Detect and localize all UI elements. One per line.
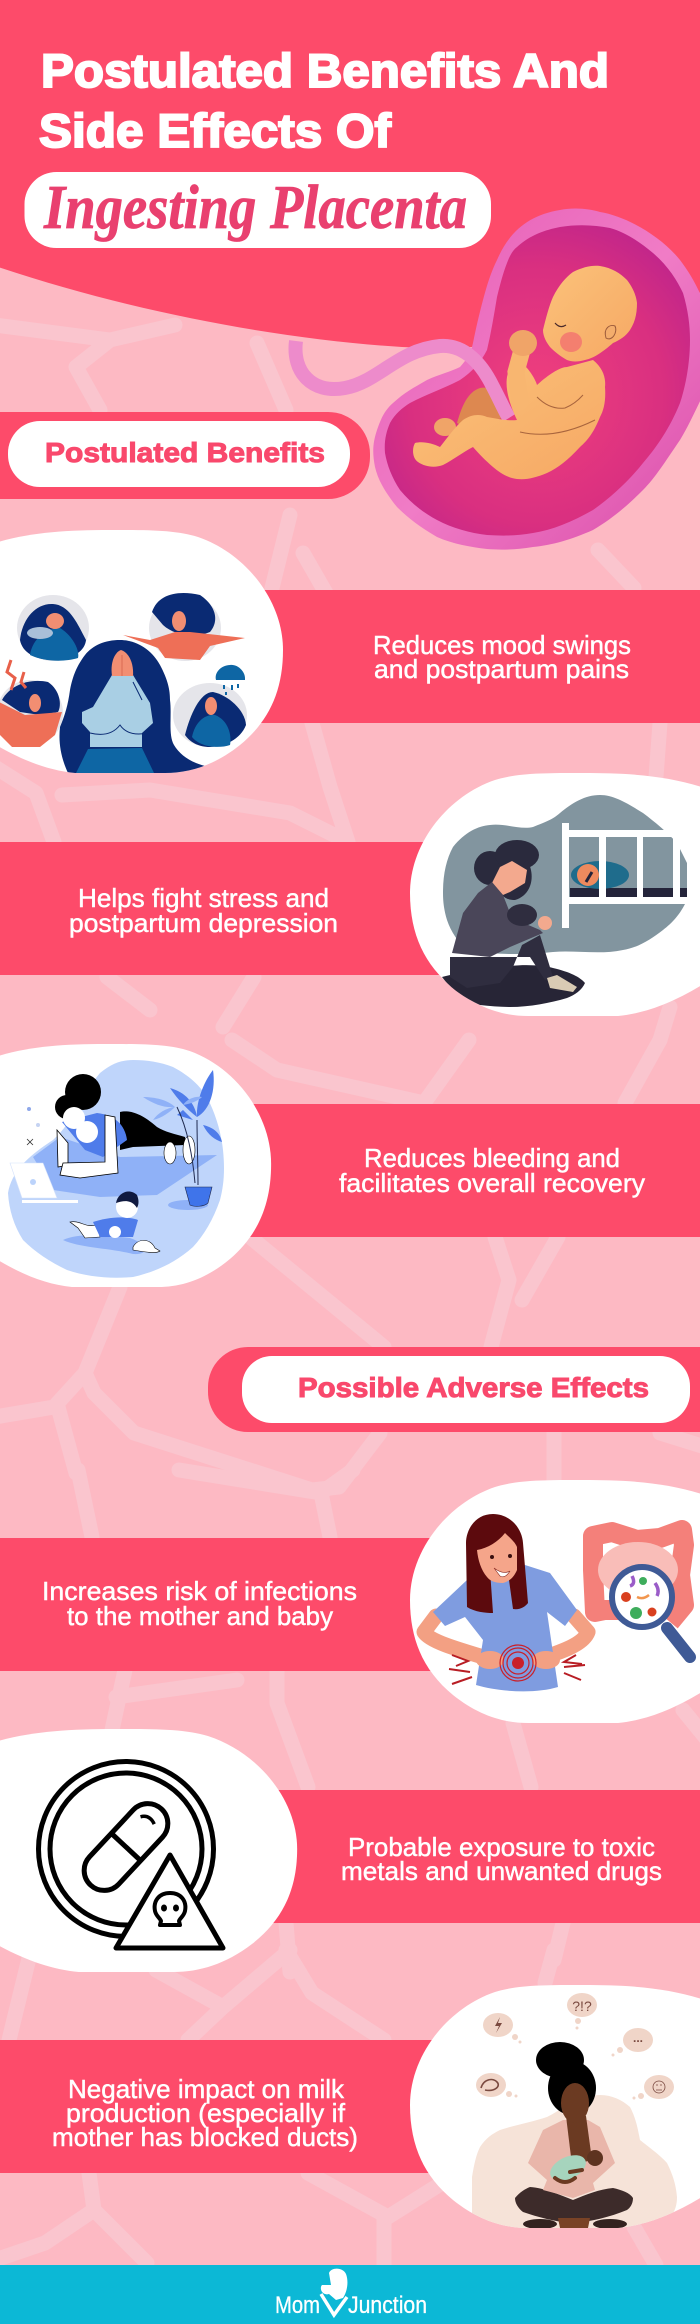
- footer bar: [0, 2265, 700, 2324]
- white blob: [410, 773, 700, 1016]
- white blob: [410, 1480, 700, 1723]
- illustration: mother doing plank with baby: [8, 1060, 224, 1278]
- adverse effect 1: infections: [0, 1480, 700, 1723]
- section heading: Postulated Benefits: [0, 412, 370, 499]
- benefit 2: stress and depression: [0, 773, 700, 1016]
- icon: capsule in plate with toxic warning: [38, 1762, 223, 1948]
- illustration: woman with stomach pain: [424, 1514, 690, 1691]
- banner text: [42, 1576, 357, 1631]
- illustration: breastfeeding mother with thought bubbles: [472, 1993, 677, 2235]
- banner text: postpartum depression: [69, 908, 338, 938]
- white blob: [0, 1729, 297, 1972]
- section heading: Possible Adverse Effects: Possible Adverse Effects: [298, 1372, 649, 1403]
- title: Postulated Benefits And: [41, 44, 609, 97]
- header banner: [0, 0, 700, 348]
- banner text: to the mother and baby: [67, 1601, 333, 1631]
- logo: MomJunction: Junction: [348, 2292, 427, 2319]
- banner text: and postpartum pains: [374, 654, 629, 684]
- white blob: [410, 1985, 700, 2228]
- adverse effect 2: toxic metals and drugs: [0, 1729, 700, 1972]
- banner text: Reduces mood swings: [373, 630, 631, 660]
- title: [39, 44, 609, 157]
- subtitle pill: Ingesting Placenta: [43, 174, 467, 242]
- logo: MomJunction: Mom: [275, 2292, 320, 2319]
- baby fist: [509, 330, 537, 356]
- banner text: metals and unwanted drugs: [341, 1856, 662, 1886]
- banner text: [339, 1143, 645, 1198]
- logo: MomJunction: [275, 2269, 427, 2319]
- title: Side Effects Of: [39, 104, 391, 157]
- far leg: [457, 388, 507, 430]
- illustration: breastfeeding mother with thought bubbles: ?!?: [572, 1998, 592, 2014]
- banner text: Increases risk of infections: [42, 1576, 357, 1606]
- banner text: [373, 630, 631, 684]
- banner text: production (especially if: [66, 2098, 346, 2128]
- banner text: Helps fight stress and: [78, 883, 329, 913]
- banner text: [341, 1832, 662, 1886]
- benefit 3: bleeding and recovery: [0, 1044, 700, 1287]
- baby body: [413, 360, 605, 479]
- banner: [200, 1790, 700, 1923]
- banner: [200, 1104, 700, 1237]
- banner text: Reduces bleeding and: [364, 1143, 620, 1173]
- banner: [0, 1538, 450, 1671]
- banner text: [52, 2074, 358, 2152]
- umbilical cord: [295, 341, 509, 418]
- white blob: [0, 1044, 271, 1287]
- banner text: mother has blocked ducts): [52, 2122, 358, 2152]
- illustration: fetus in womb with umbilical cord: [295, 209, 700, 550]
- banner: [0, 842, 450, 975]
- banner text: [69, 883, 338, 938]
- logo mark: [321, 2269, 347, 2300]
- illustration: depressed mother and crying baby in crib: [442, 795, 687, 1007]
- illustration: distressed women: [0, 593, 247, 775]
- white blob: [0, 530, 283, 773]
- banner text: facilitates overall recovery: [339, 1168, 645, 1198]
- banner: [200, 590, 700, 723]
- benefit 1: mood swings: [0, 530, 700, 775]
- baby head: [543, 266, 637, 362]
- section heading: Postulated Benefits: Postulated Benefits: [45, 437, 325, 468]
- banner text: Negative impact on milk: [68, 2074, 345, 2104]
- baby arm: [516, 350, 522, 402]
- illustration: breastfeeding mother with thought bubbles: ...: [633, 2031, 643, 2045]
- section heading: Possible Adverse Effects: [208, 1347, 700, 1432]
- banner text: Probable exposure to toxic: [348, 1832, 655, 1862]
- banner: [0, 2040, 450, 2173]
- adverse effect 3: milk production: [0, 1985, 700, 2235]
